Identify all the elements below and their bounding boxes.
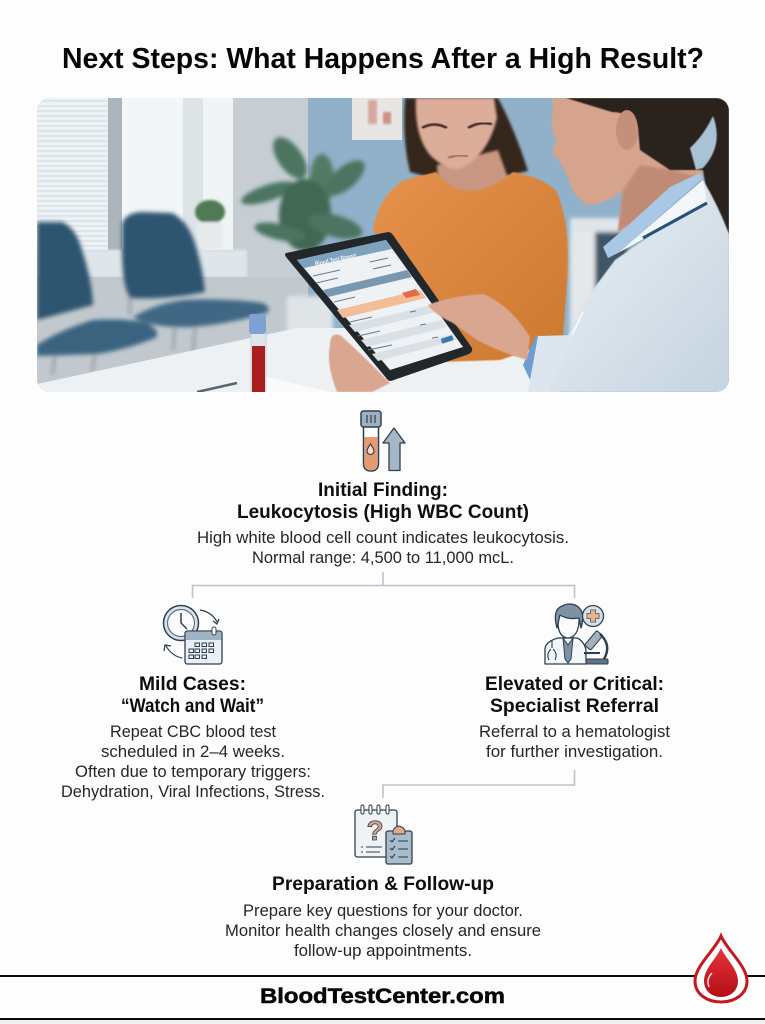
text: preparation description: follow-up appointments. xyxy=(294,942,472,960)
patient xyxy=(373,98,568,362)
text: initial finding description xyxy=(197,529,569,567)
heading: mild cases: Mild Cases: xyxy=(139,673,246,695)
background shelf xyxy=(570,218,627,337)
footer brand: BloodTestCenter.com xyxy=(260,985,505,1008)
wall and windows xyxy=(37,98,729,392)
table xyxy=(37,328,560,392)
title: Next Steps: What Happens After a High Result? xyxy=(62,43,704,75)
coat xyxy=(548,180,729,392)
icon: doctor with microscope xyxy=(545,604,608,664)
arrow: connector to preparation xyxy=(383,770,574,798)
icon: notepad and checklist xyxy=(355,805,412,864)
heading: elevated or critical: Elevated or Critical: xyxy=(485,673,664,695)
text: preparation description: Monitor health changes closely and ensure xyxy=(225,922,541,940)
heading: preparation and follow-up: Preparation & Follow-up xyxy=(272,873,494,895)
text: mild cases description: scheduled in 2–4 weeks. xyxy=(101,743,285,761)
doctor xyxy=(523,98,729,392)
blood tube xyxy=(249,314,266,392)
text: mild cases description: Often due to temporary triggers: xyxy=(75,763,311,781)
text: mild cases description xyxy=(61,723,325,801)
icon: blood drop logo xyxy=(695,936,747,1002)
doctor hair xyxy=(566,98,729,235)
arrow: branch connector from initial finding xyxy=(192,572,574,598)
heading: initial finding xyxy=(237,479,529,523)
heading: elevated or critical xyxy=(485,673,664,717)
photo: doctor reviewing blood test report on tablet with patient xyxy=(37,98,729,392)
icon: notepad and checklist: ? xyxy=(366,815,384,846)
icon: test tube with up arrow xyxy=(361,411,405,471)
small potted plant xyxy=(195,200,225,249)
doctor skin xyxy=(552,98,703,232)
text: initial finding description: High white blood cell count indicates leukocytosis. xyxy=(197,529,569,547)
large plant xyxy=(239,131,370,332)
text: mild cases description: Dehydration, Viral Infections, Stress. xyxy=(61,783,325,801)
text: elevated or critical description: for further investigation. xyxy=(486,743,663,761)
text: preparation description xyxy=(225,902,541,960)
heading: initial finding: Leukocytosis (High WBC Count) xyxy=(237,501,529,523)
hands xyxy=(329,294,530,392)
heading: elevated or critical: Specialist Referral xyxy=(490,695,659,717)
text: mild cases description: Repeat CBC blood test xyxy=(110,723,276,741)
footer xyxy=(0,975,765,1024)
heading: mild cases: “Watch and Wait” xyxy=(121,695,264,717)
heading: mild cases xyxy=(121,673,264,717)
text: initial finding description: Normal range: 4,500 to 11,000 mcL. xyxy=(252,549,514,567)
icon: clock and calendar xyxy=(164,606,222,664)
tablet: Blood Test Report xyxy=(314,253,357,268)
text: preparation description: Prepare key questions for your doctor. xyxy=(243,902,523,920)
chairs xyxy=(37,212,269,375)
text: elevated or critical description: Referral to a hematologist xyxy=(479,723,670,741)
heading: initial finding: Initial Finding: xyxy=(318,479,448,501)
text: elevated or critical description xyxy=(479,723,670,761)
tablet xyxy=(285,232,472,381)
